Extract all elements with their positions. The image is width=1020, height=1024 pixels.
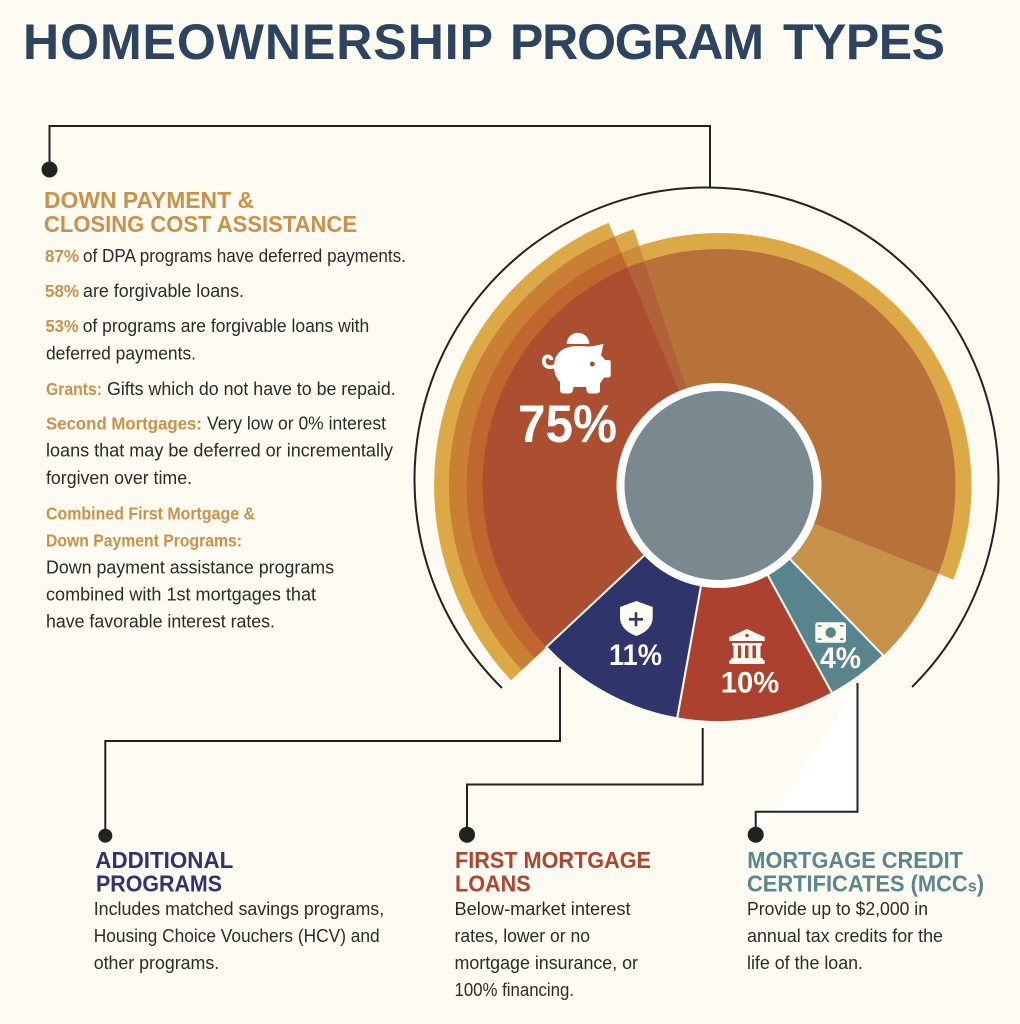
text block: first mortgage loans — [454, 899, 638, 1000]
text block: additional programs: Includes matched savings programs, — [94, 899, 384, 919]
outer arc around chart — [414, 188, 998, 688]
text block: down payment details: forgiven over time. — [46, 468, 192, 488]
heading: mortgage credit certificates: CERTIFICATES (MCCs) — [747, 871, 984, 897]
icon: money bill — [815, 622, 846, 643]
text block: down payment details: Grants: — [46, 379, 102, 399]
text block: mortgage credit certificates: life of the loan. — [747, 953, 863, 973]
text block: down payment details: of DPA programs have deferred payments. — [83, 246, 406, 266]
text block: down payment details: 58% — [45, 281, 79, 301]
heading: additional programs — [95, 847, 233, 897]
text block: down payment details: Second Mortgages: — [46, 414, 202, 434]
connector: first mortgage — [459, 728, 703, 843]
text block: first mortgage loans: 100% financing. — [454, 980, 574, 1000]
text block: down payment details: of programs are forgivable loans with — [83, 316, 369, 336]
text block: down payment details: are forgivable loans. — [83, 281, 244, 301]
text block: down payment details: 87% — [45, 246, 79, 266]
text block: additional programs: other programs. — [94, 953, 219, 973]
heading: down payment and closing cost assistance: CLOSING COST ASSISTANCE — [44, 211, 357, 237]
connector: additional programs — [98, 667, 560, 843]
icon: bank — [729, 629, 765, 664]
wedge: first mortgage 10% — [677, 486, 832, 722]
text block: mortgage credit certificates: Provide up to $2,000 in — [747, 899, 928, 919]
text block: down payment details: deferred payments. — [46, 343, 196, 363]
heading: mortgage credit certificates: MORTGAGE CREDIT — [747, 847, 963, 873]
heading: additional programs: PROGRAMS — [96, 871, 222, 897]
center circle — [616, 383, 822, 588]
wedge: down payment 75% — [434, 223, 971, 680]
text block: mortgage credit certificates — [747, 899, 943, 973]
label: 11%: 11% — [609, 639, 662, 672]
title — [23, 14, 945, 70]
connector: mortgage credit certificates — [748, 683, 858, 843]
text block: additional programs: Housing Choice Vouchers (HCV) and — [94, 926, 380, 946]
title: TYPES — [783, 14, 945, 70]
chart: program share wedges — [434, 223, 971, 722]
text block: down payment details: Very low or 0% interest — [207, 414, 386, 434]
text block: down payment details: Combined First Mortgage & — [46, 503, 255, 523]
title: HOMEOWNERSHIP — [23, 14, 493, 70]
text block: down payment details: Down payment assistance programs — [46, 557, 334, 577]
faint white wedge — [757, 684, 857, 832]
icon: piggy bank — [544, 333, 611, 394]
heading: mortgage credit certificates — [747, 847, 984, 897]
text block: down payment details: have favorable interest rates. — [46, 611, 275, 631]
text block: mortgage credit certificates: annual tax credits for the — [747, 926, 943, 946]
wedge: additional programs 11% — [546, 486, 719, 718]
label: 75%: 75% — [518, 395, 617, 454]
wedge: mortgage credit certificates 4% — [719, 486, 883, 693]
heading: first mortgage loans — [455, 847, 651, 897]
label: 4%: 4% — [820, 642, 861, 675]
text block: down payment details: Gifts which do not have to be repaid. — [107, 379, 396, 399]
title: PROGRAM — [510, 14, 764, 70]
text block: down payment details — [45, 246, 406, 631]
text block: down payment details: 53% — [46, 316, 79, 336]
text block: down payment details: loans that may be deferred or incrementally — [46, 441, 393, 461]
connector: down payment — [42, 126, 710, 187]
text block: down payment details: combined with 1st mortgages that — [46, 585, 316, 605]
heading: first mortgage loans: FIRST MORTGAGE — [455, 847, 651, 873]
text block: down payment details: Down Payment Programs: — [46, 531, 242, 551]
heading: first mortgage loans: LOANS — [455, 871, 531, 897]
heading: additional programs: ADDITIONAL — [95, 847, 233, 873]
text block: first mortgage loans: rates, lower or no — [454, 926, 590, 946]
label: 10%: 10% — [721, 667, 779, 700]
text block: first mortgage loans: mortgage insurance, or — [454, 953, 638, 973]
text block: additional programs — [94, 899, 384, 973]
heading: down payment and closing cost assistance — [44, 187, 357, 237]
text block: first mortgage loans: Below-market interest — [454, 899, 630, 919]
heading: down payment and closing cost assistance: DOWN PAYMENT & — [44, 187, 254, 213]
icon: shield — [620, 601, 653, 636]
